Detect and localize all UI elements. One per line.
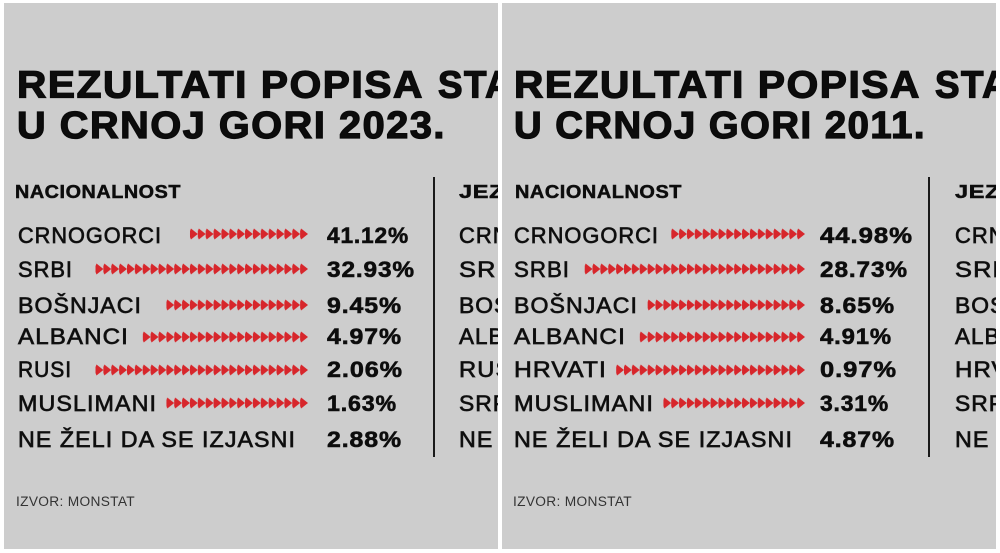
row: Bošnjaci: 8.65% [820,293,895,318]
row: Srbi [514,261,907,278]
source note: IZVOR: MONSTAT [513,494,632,509]
row: Ne želi da se izjasni [20,427,401,448]
clipped column: jezik: BOSANSKI [459,293,584,318]
row: Hrvati: 0.97% [820,357,897,382]
clipped column: jezik: JEZIK [459,182,529,202]
row: Albanci [18,328,401,344]
row: Albanci: 4.97% [327,324,402,349]
clipped column: jezik [954,184,996,448]
title 2023: REZULTATI POPISA [17,64,424,106]
clipped column: jezik: RUSKI [459,357,537,382]
row: Bošnjaci: BOŠNJACI [514,293,638,318]
row: Crnogorci [514,227,912,244]
row: Ne želi da se izjasni: NE ŽELI DA SE IZJASNI [18,427,296,452]
row: Muslimani [516,395,888,412]
clipped column: jezik: CRNOGORSKI [459,223,619,248]
title 2023: U CRNOJ GORI 2023. [17,105,446,147]
clipped column: jezik: SRPSKOHRVATSKI [459,391,679,416]
row: Srbi: 28.73% [820,257,908,282]
row: Muslimani [20,395,396,412]
row: Ne želi da se izjasni [516,427,894,448]
clipped column: jezik: NE ŽELI DA SE IZJASNI [459,427,737,452]
row: Bošnjaci [20,292,401,314]
row: Crnogorci: 44.98% [820,223,913,248]
row: Hrvati [516,361,896,378]
clipped column: jezik: ALBANSKI [459,324,577,349]
row: Srbi: 32.93% [327,257,415,282]
title 2011 [516,70,996,140]
panel: census 2023 [4,3,498,549]
row: Rusi: 2.06% [327,357,403,382]
row: Rusi: RUSI [18,357,72,382]
clipped column: jezik [458,184,498,448]
row: Hrvati: HRVATI [514,357,607,382]
title 2011: U CRNOJ GORI 2011. [514,105,926,147]
heading: nacionalnost: NACIONALNOST [515,182,682,202]
row: Rusi [19,361,402,378]
panel: census 2011 [502,3,1000,549]
heading: nacionalnost: NACIONALNOST [15,182,181,202]
title 2023 [18,70,498,140]
row: Muslimani: 1.63% [327,391,397,416]
row: Muslimani: MUSLIMANI [18,391,157,416]
row: Srbi [18,261,414,278]
clipped column: jezik: SRPSKI [459,257,559,282]
row: Bošnjaci [516,292,894,314]
row: Albanci: ALBANCI [514,324,626,349]
title 2023: STANOVNIŠTVA [438,62,738,106]
row: Ne želi da se izjasni: 4.87% [820,427,895,452]
row: Crnogorci: 41.12% [327,223,409,248]
row: Srbi: SRBI [514,257,570,282]
row: Albanci: ALBANCI [18,324,129,349]
row: Srbi: SRBI [18,257,73,282]
row: Albanci [514,328,891,344]
title 2011: REZULTATI POPISA [514,64,921,106]
row: Bošnjaci: BOŠNJACI [18,293,142,318]
row: Bošnjaci: 9.45% [327,293,402,318]
row: Muslimani: MUSLIMANI [514,391,654,416]
row: Ne želi da se izjasni: 2.88% [327,427,402,452]
row: Albanci: 4.91% [820,324,892,349]
row: Crnogorci: CRNOGORCI [18,223,162,248]
row: Crnogorci [18,227,408,244]
source note: IZVOR: MONSTAT [16,494,135,509]
row: Ne želi da se izjasni: NE ŽELI DA SE IZJASNI [514,427,793,452]
row: Crnogorci: CRNOGORCI [514,223,659,248]
row: Muslimani: 3.31% [820,391,889,416]
